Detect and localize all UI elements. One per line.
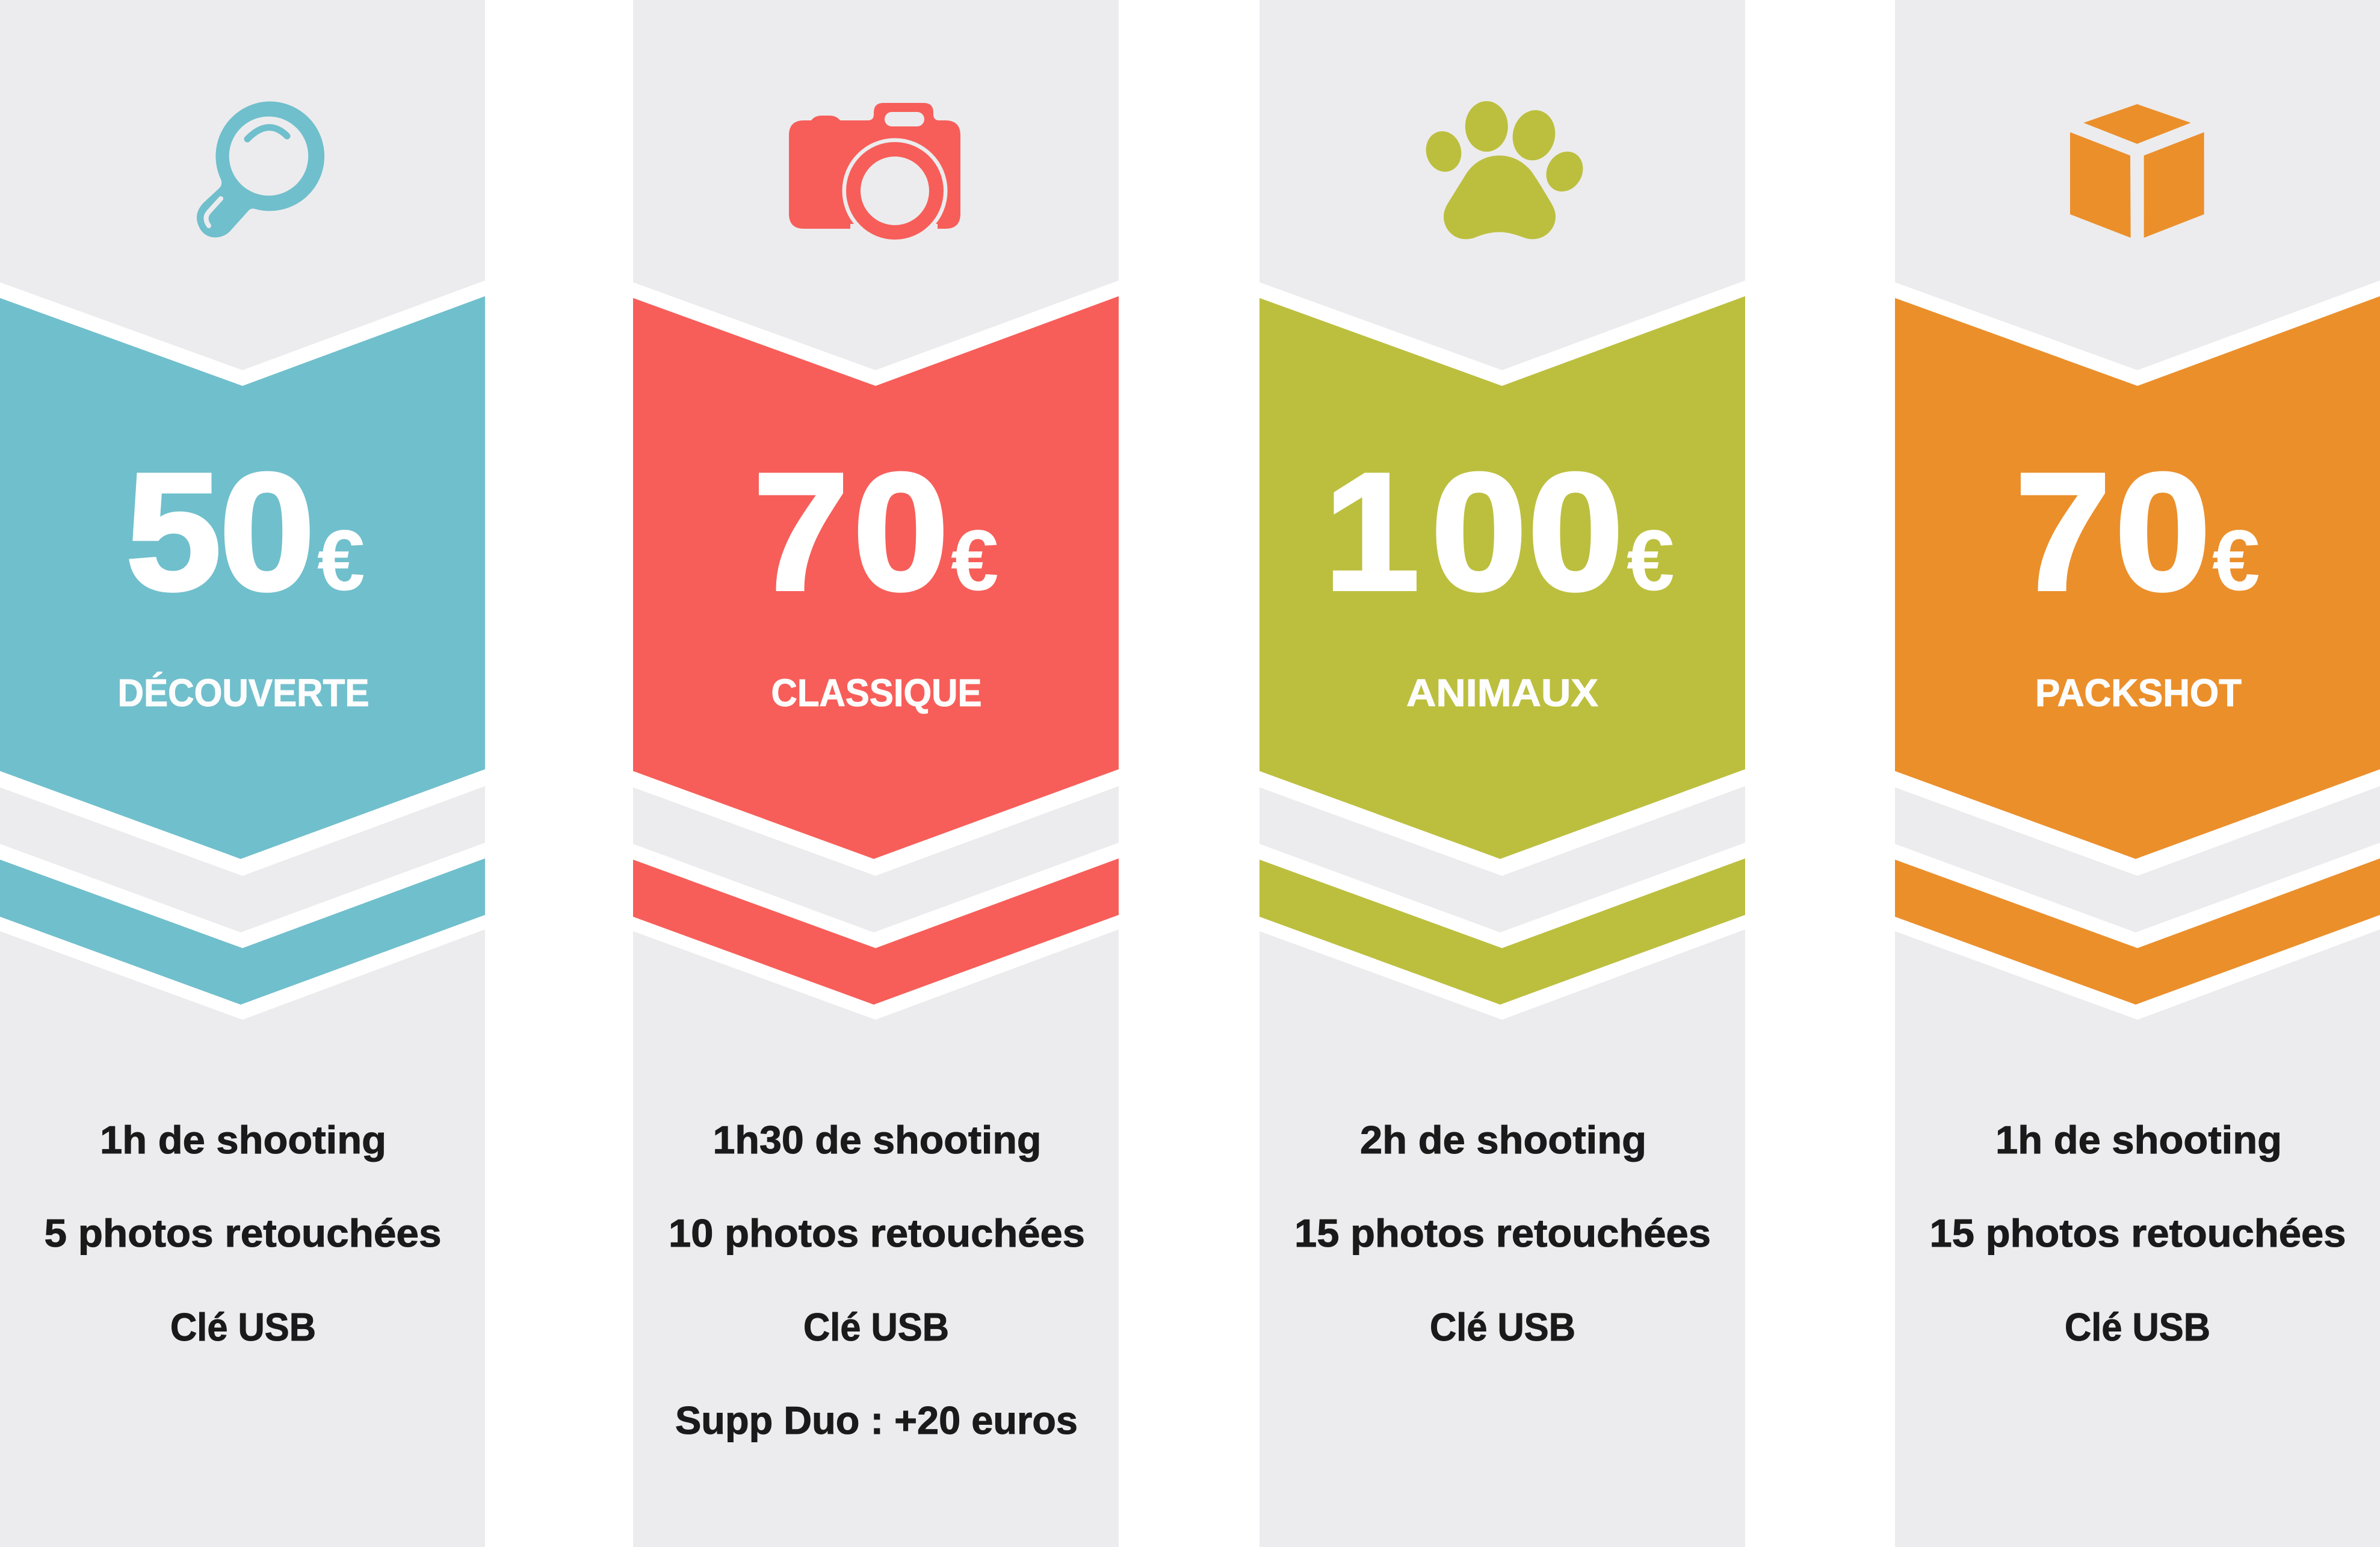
lower chevron xyxy=(0,858,485,1005)
panel: classique xyxy=(633,0,1119,1547)
price: 70 euros: € xyxy=(2212,513,2260,609)
panel background xyxy=(1260,0,1745,1547)
plan name: DÉCOUVERTE xyxy=(118,671,369,715)
icon: paw print xyxy=(1421,101,1590,239)
features list: 15 photos retouchées xyxy=(1929,1211,2346,1255)
features list: 1h de shooting xyxy=(1995,1118,2282,1162)
features list xyxy=(1929,1118,2346,1349)
features list: Clé USB xyxy=(2065,1305,2210,1349)
price: 70 euros: € xyxy=(951,513,999,609)
price: 70 euros: 70 xyxy=(753,438,948,625)
price banner xyxy=(1260,296,1745,859)
features list: Clé USB xyxy=(803,1305,949,1349)
features list: Clé USB xyxy=(170,1305,316,1349)
icon: box xyxy=(2070,104,2204,238)
panel: packshot xyxy=(1895,0,2380,1547)
price banner xyxy=(633,296,1119,859)
features list: 1h30 de shooting xyxy=(712,1118,1041,1162)
plan name: CLASSIQUE xyxy=(771,671,982,715)
price banner xyxy=(0,296,485,859)
lower chevron xyxy=(633,858,1119,1005)
panel background xyxy=(1895,0,2380,1547)
features list: 15 photos retouchées xyxy=(1294,1211,1711,1255)
features list: Supp Duo : +20 euros xyxy=(675,1398,1078,1442)
panel background xyxy=(633,0,1119,1547)
price: 50 euros: € xyxy=(317,513,365,609)
features list xyxy=(669,1118,1085,1442)
panel: découverte xyxy=(0,0,485,1547)
icon: camera xyxy=(789,103,960,243)
price: 100 euros: 100 xyxy=(1324,438,1624,625)
icon: magnifying glass xyxy=(197,101,324,238)
panel: animaux xyxy=(1260,0,1745,1547)
features list: 1h de shooting xyxy=(100,1118,386,1162)
features list: 5 photos retouchées xyxy=(45,1211,442,1255)
plan name: PACKSHOT xyxy=(2035,671,2242,715)
panel background xyxy=(0,0,485,1547)
price: 70 euros: 70 xyxy=(2015,438,2210,625)
features list: 10 photos retouchées xyxy=(669,1211,1085,1255)
features list xyxy=(45,1118,442,1349)
features list xyxy=(1294,1118,1711,1349)
lower chevron xyxy=(1260,858,1745,1005)
features list: Clé USB xyxy=(1430,1305,1575,1349)
plan name: ANIMAUX xyxy=(1406,671,1598,715)
price: 100 euros: € xyxy=(1627,513,1675,609)
features list: 2h de shooting xyxy=(1360,1118,1646,1162)
lower chevron xyxy=(1895,858,2380,1005)
price banner xyxy=(1895,296,2380,859)
price: 50 euros: 50 xyxy=(126,438,315,625)
